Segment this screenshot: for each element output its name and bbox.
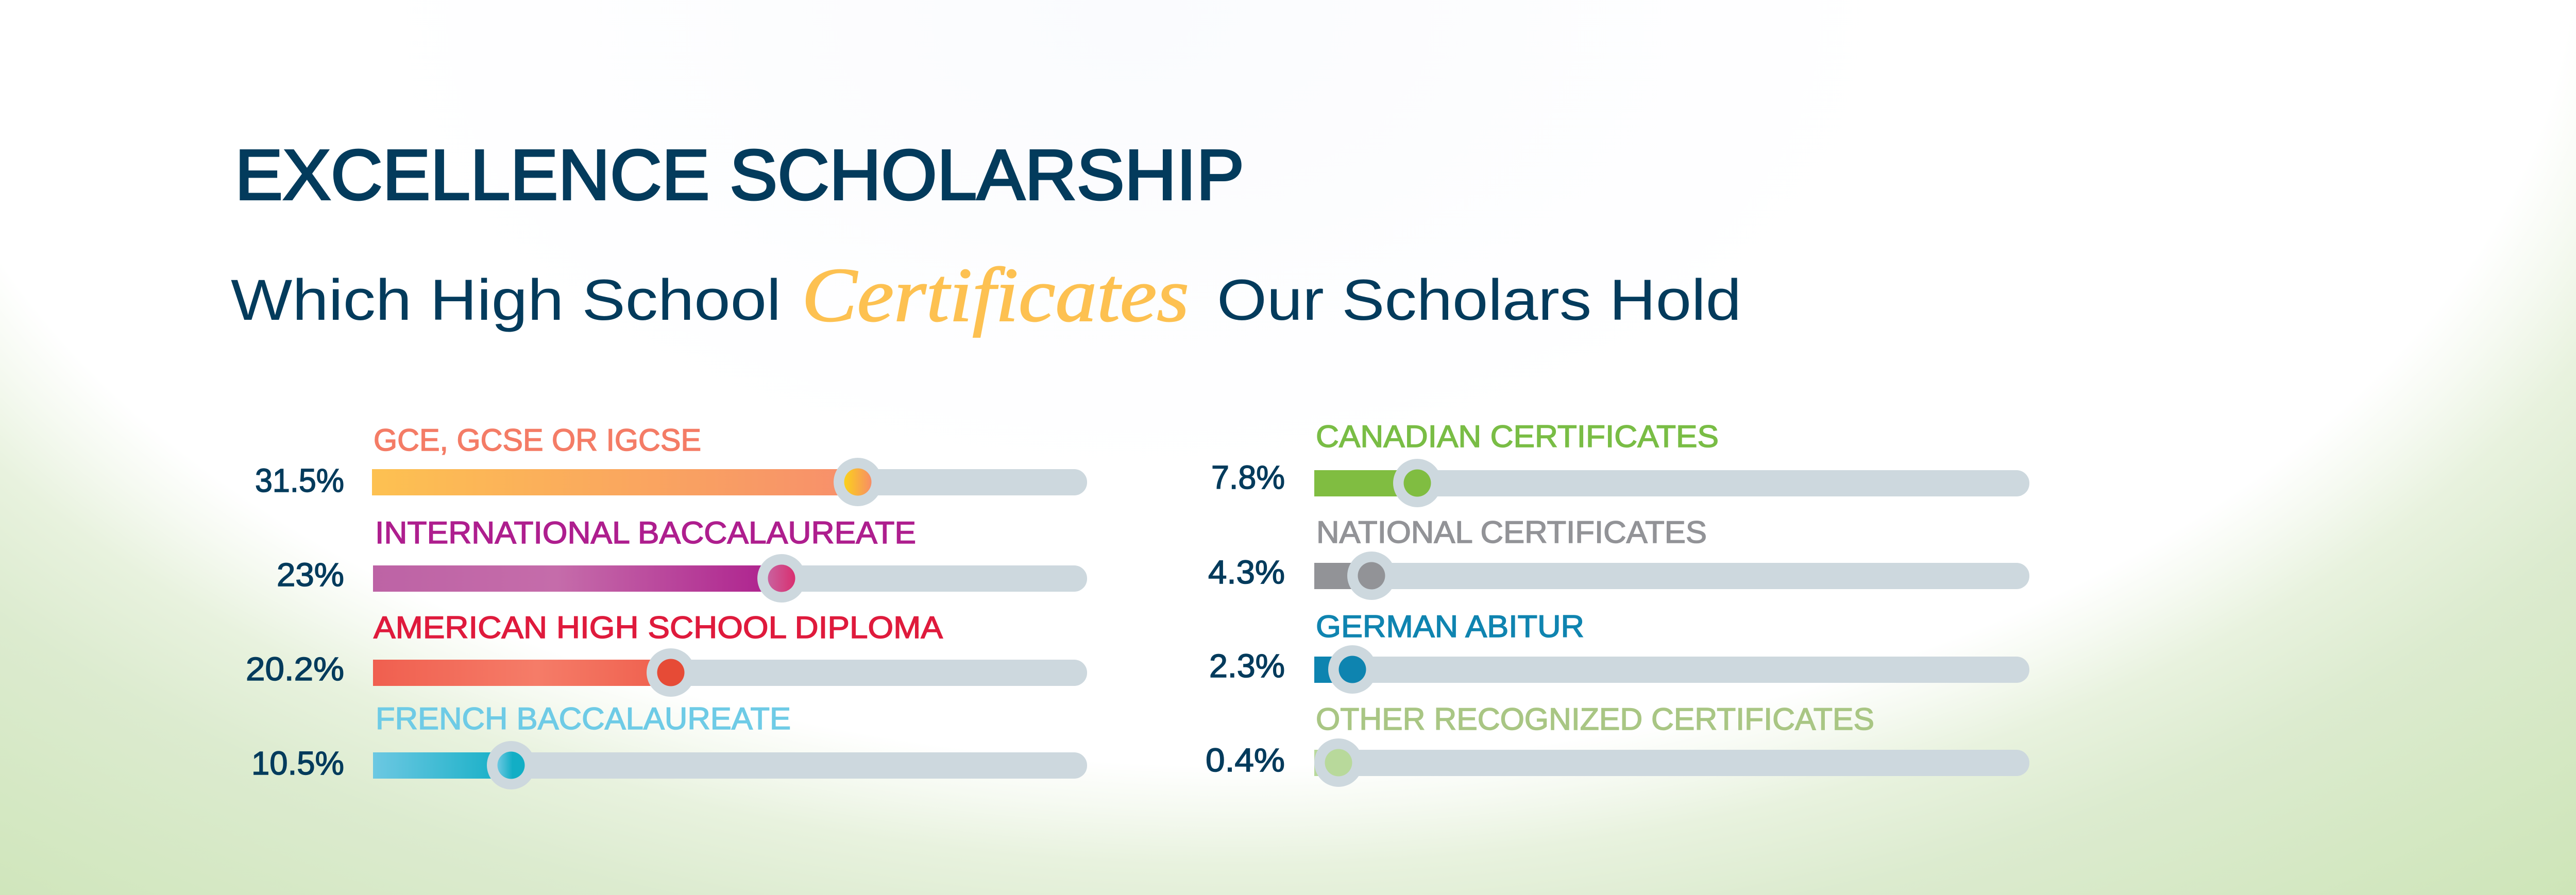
row: French Baccalaureate 10.5%: 10.5%: [251, 745, 344, 782]
panel: left column of certificates: [246, 423, 1087, 789]
subtitle: Which High School: [231, 268, 781, 332]
row: Canadian Certificates 7.8%: 7.8%: [1211, 459, 1285, 496]
row: International Baccalaureate 23%: [277, 515, 1087, 603]
row: Canadian Certificates 7.8%: [1211, 419, 2029, 507]
script word: Certificates: Certificates: [802, 252, 1189, 338]
subtitle: Our Scholars Hold: [1217, 268, 1741, 332]
row: International Baccalaureate 23%: 23%: [277, 556, 344, 593]
row: National Certificates 4.3%: [1208, 515, 2029, 600]
row: National Certificates 4.3%: NATIONAL CERTIFICATES: [1316, 515, 1707, 549]
row: Other Recognized Certificates 0.4%: OTHER RECOGNIZED CERTIFICATES: [1316, 702, 1874, 736]
panel: right column of certificates: [1206, 419, 2029, 787]
row: French Baccalaureate 10.5%: [251, 701, 1087, 789]
row: French Baccalaureate 10.5%: FRENCH BACCALAUREATE: [376, 701, 791, 736]
subtitle: [231, 252, 1741, 338]
row: American High School Diploma 20.2%: AMERICAN HIGH SCHOOL DIPLOMA: [374, 610, 943, 645]
row: Other Recognized Certificates 0.4%: 0.4%: [1206, 742, 1285, 779]
row: Other Recognized Certificates 0.4%: [1206, 702, 2029, 787]
row: National Certificates 4.3%: 4.3%: [1208, 554, 1285, 591]
row: Canadian Certificates 7.8%: CANADIAN CERTIFICATES: [1316, 419, 1719, 454]
row: American High School Diploma 20.2%: [246, 610, 1087, 697]
row: German Abitur 2.3%: 2.3%: [1209, 647, 1285, 684]
row: American High School Diploma 20.2%: 20.2%: [246, 650, 344, 687]
row: German Abitur 2.3%: [1209, 609, 2029, 694]
row: GCE, GCSE or IGCSE 31.5%: GCE, GCSE OR IGCSE: [374, 423, 701, 457]
row: German Abitur 2.3%: GERMAN ABITUR: [1316, 609, 1584, 644]
title: EXCELLENCE SCHOLARSHIP: [235, 135, 1244, 215]
row: GCE, GCSE or IGCSE 31.5%: [255, 423, 1087, 506]
row: GCE, GCSE or IGCSE 31.5%: 31.5%: [255, 462, 344, 499]
row: International Baccalaureate 23%: INTERNATIONAL BACCALAUREATE: [375, 515, 916, 550]
